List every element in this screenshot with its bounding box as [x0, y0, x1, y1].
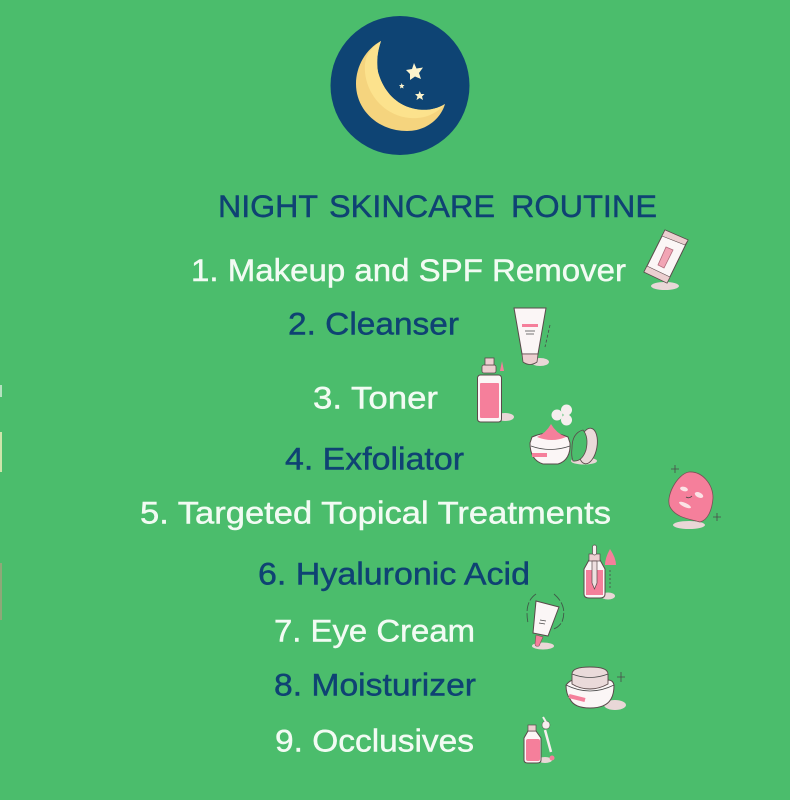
- step 2 text: 2. Cleanser: [288, 306, 459, 342]
- step 4 text: 4. Exfoliator: [285, 440, 464, 476]
- title: NIGHT: [218, 188, 318, 224]
- icon: moon and stars badge: [330, 16, 470, 155]
- icon: moisturizer jar: [566, 667, 626, 710]
- icon: toner pump bottle: [478, 358, 514, 422]
- title: ROUTINE: [511, 188, 657, 224]
- step 5 text: 5. Targeted Topical Treatments: [140, 494, 611, 530]
- icon: eye cream tube: [527, 594, 564, 650]
- title: [218, 188, 657, 224]
- step 8 text: 8. Moisturizer: [274, 666, 476, 702]
- icon: sheet face mask: [669, 465, 721, 529]
- icon: exfoliator jar with lid and foam: [530, 404, 600, 465]
- step 7 text: 7. Eye Cream: [274, 612, 475, 648]
- step 3 text: 3. Toner: [313, 380, 438, 416]
- step 6 text: 6. Hyaluronic Acid: [258, 556, 530, 592]
- icon: cleanser tube: [514, 308, 550, 366]
- step 1 text: 1. Makeup and SPF Remover: [191, 252, 626, 288]
- icon: makeup wipe packet: [644, 230, 688, 290]
- title: SKINCARE: [329, 188, 495, 224]
- icon: hyaluronic acid dropper bottle: [584, 545, 616, 600]
- step 9 text: 9. Occlusives: [275, 722, 474, 758]
- icon: occlusive oil bottle and dropper: [524, 717, 554, 763]
